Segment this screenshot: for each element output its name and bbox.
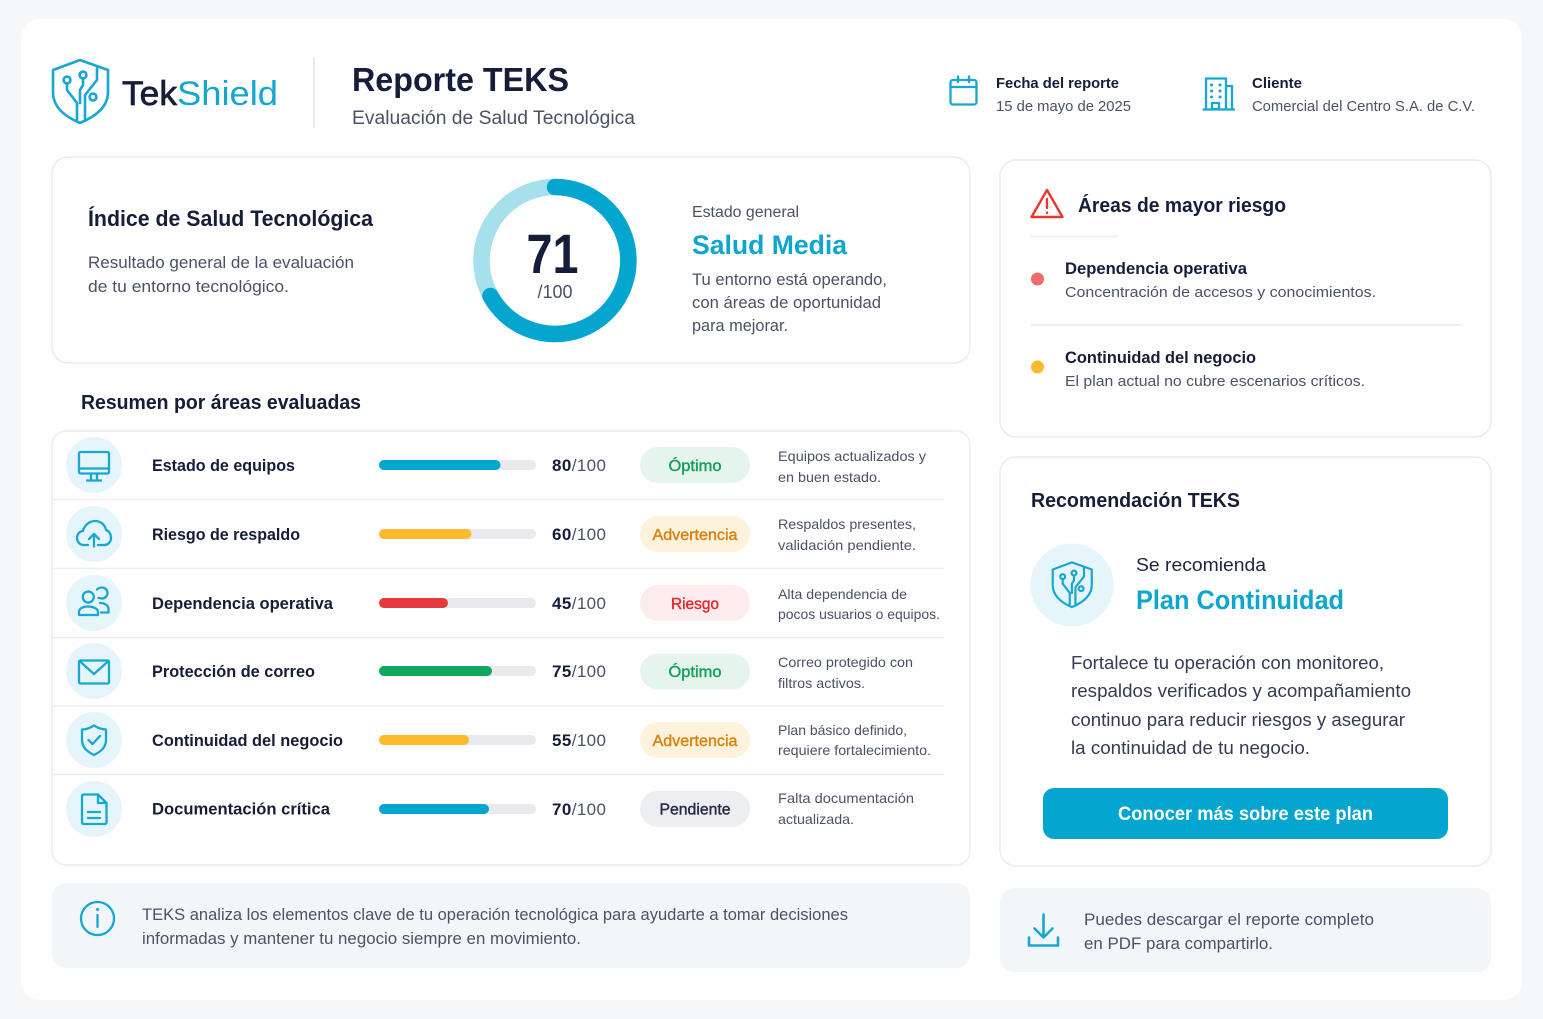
icon: info (81, 902, 114, 935)
risk item: continuidad: Continuidad del negocio (1065, 349, 1256, 367)
recommendation text: la continuidad de tu negocio. (1071, 738, 1310, 758)
recommendation heading: Recomendación TEKS (1031, 490, 1240, 512)
icon: building (1204, 78, 1234, 110)
download text: en PDF para compartirlo. (1084, 935, 1273, 953)
row: continuidad del negocio: Plan básico definido, (778, 722, 907, 738)
icon: cloud upload (66, 506, 122, 562)
row: dependencia operativa: 45/100 (552, 594, 606, 613)
recommendation text (1071, 653, 1411, 758)
row: dependencia operativa (66, 575, 940, 631)
row: dependencia operativa: Dependencia operativa (152, 594, 334, 613)
row: riesgo de respaldo: 60/100 (552, 525, 606, 544)
row: estado de equipos: Óptimo (668, 458, 722, 475)
panel: highest risk areas (1000, 160, 1491, 437)
panel: TEKS recommendation (1000, 457, 1491, 866)
row: documentacion critica: 70/100 (552, 800, 606, 819)
row: continuidad del negocio: Advertencia (652, 733, 738, 750)
row: riesgo de respaldo: Advertencia (652, 527, 738, 544)
overall status: Salud Media (692, 230, 848, 260)
row: riesgo de respaldo: Riesgo de respaldo (152, 525, 300, 544)
row: riesgo de respaldo (66, 506, 916, 562)
panel: evaluated areas table (52, 431, 970, 865)
row: proteccion de correo: Protección de correo (152, 662, 315, 681)
button: learn more (1043, 788, 1448, 839)
client: Comercial del Centro S.A. de C.V. (1252, 98, 1475, 115)
logo wordmark: Tek (122, 75, 178, 113)
donut chart: score 71: /100 (538, 282, 572, 302)
row: continuidad del negocio: Continuidad del negocio (152, 731, 343, 750)
overall status: Estado general (692, 204, 799, 221)
row: proteccion de correo: Óptimo (668, 664, 722, 681)
row: proteccion de correo (66, 643, 913, 699)
icon: download (1029, 914, 1058, 946)
client (1252, 75, 1475, 115)
info text: informadas y mantener tu negocio siempre en movimiento. (142, 930, 581, 948)
panel: health index (52, 157, 970, 363)
download text: Puedes descargar el reporte completo (1084, 911, 1374, 929)
info text: TEKS analiza los elementos clave de tu operación tecnológica para ayudarte a tomar decisiones (142, 906, 848, 924)
recommended plan: Plan Continuidad (1136, 585, 1344, 615)
overall status: Tu entorno está operando, (692, 271, 887, 289)
row: documentacion critica (66, 781, 914, 837)
row: proteccion de correo: filtros activos. (778, 675, 865, 691)
logo wordmark (122, 75, 278, 113)
row: riesgo de respaldo: validación pendiente. (778, 537, 916, 553)
row: estado de equipos: Estado de equipos (152, 456, 295, 475)
risk item: dependencia (1031, 260, 1376, 301)
health index description: de tu entorno tecnológico. (88, 277, 289, 296)
row: proteccion de correo: Correo protegido con (778, 654, 913, 670)
row: documentacion critica: Pendiente (660, 802, 730, 818)
row: dependencia operativa: Alta dependencia de (778, 586, 907, 602)
risk item: dependencia: Concentración de accesos y conocimientos. (1065, 284, 1376, 301)
row: estado de equipos: en buen estado. (778, 469, 881, 485)
icon: users (66, 575, 122, 631)
donut chart: score 71 (482, 187, 628, 334)
recommendation text: continuo para reducir riesgos y asegurar (1071, 710, 1405, 730)
row: dependencia operativa: pocos usuarios o equipos. (778, 606, 940, 622)
client: Cliente (1252, 75, 1302, 92)
info text (142, 906, 848, 948)
section heading: summary: Resumen por áreas evaluadas (81, 391, 361, 414)
row: documentacion critica: Falta documentación (778, 790, 914, 806)
icon: monitor (66, 437, 122, 493)
report title: Reporte TEKS (352, 61, 569, 98)
panel: download note (1000, 888, 1491, 972)
row: proteccion de correo: 75/100 (552, 662, 606, 681)
report date: 15 de mayo de 2025 (996, 98, 1131, 115)
row: estado de equipos: 80/100 (552, 456, 606, 475)
overall status: con áreas de oportunidad (692, 294, 881, 312)
row: riesgo de respaldo: Respaldos presentes, (778, 516, 916, 532)
recommendation text: Fortalece tu operación con monitoreo, (1071, 653, 1384, 673)
icon: document (66, 781, 122, 837)
health index description (88, 253, 354, 296)
icon: TekShield logo shield (53, 60, 108, 123)
donut chart: score 71: 71 (526, 222, 578, 285)
overall status (692, 204, 887, 335)
risk item: dependencia: Dependencia operativa (1065, 260, 1248, 278)
row: documentacion critica: actualizada. (778, 811, 854, 827)
recommended plan: Se recomienda (1136, 554, 1267, 575)
icon: calendar (950, 76, 976, 104)
icon: mail (66, 643, 122, 699)
row: continuidad del negocio: 55/100 (552, 731, 606, 750)
button: learn more: Conocer más sobre este plan (1118, 804, 1373, 825)
row: continuidad del negocio: requiere fortalecimiento. (778, 742, 931, 758)
row: estado de equipos: Equipos actualizados y (778, 448, 926, 464)
report date: Fecha del reporte (996, 75, 1119, 92)
row: continuidad del negocio (66, 712, 931, 768)
icon: shield badge (1030, 544, 1114, 626)
recommended plan (1136, 554, 1344, 615)
icon: warning triangle (1032, 190, 1062, 217)
download text (1084, 911, 1374, 953)
risk heading: Áreas de mayor riesgo (1078, 194, 1286, 217)
recommendation text: respaldos verificados y acompañamiento (1071, 681, 1411, 701)
row: dependencia operativa: Riesgo (671, 596, 719, 613)
health index description: Resultado general de la evaluación (88, 253, 354, 272)
row: documentacion critica: Documentación crítica (152, 800, 331, 818)
header (53, 57, 1475, 129)
row: estado de equipos (66, 437, 926, 493)
logo wordmark: Shield (177, 75, 278, 113)
overall status: para mejorar. (692, 317, 788, 335)
report subtitle: Evaluación de Salud Tecnológica (352, 108, 635, 129)
risk item: continuidad (1031, 349, 1365, 390)
icon: shield check (66, 712, 122, 768)
report date (996, 75, 1131, 115)
risk item: continuidad: El plan actual no cubre escenarios críticos. (1065, 373, 1365, 390)
panel: info note (52, 883, 970, 968)
health index heading: Índice de Salud Tecnológica (88, 206, 374, 231)
